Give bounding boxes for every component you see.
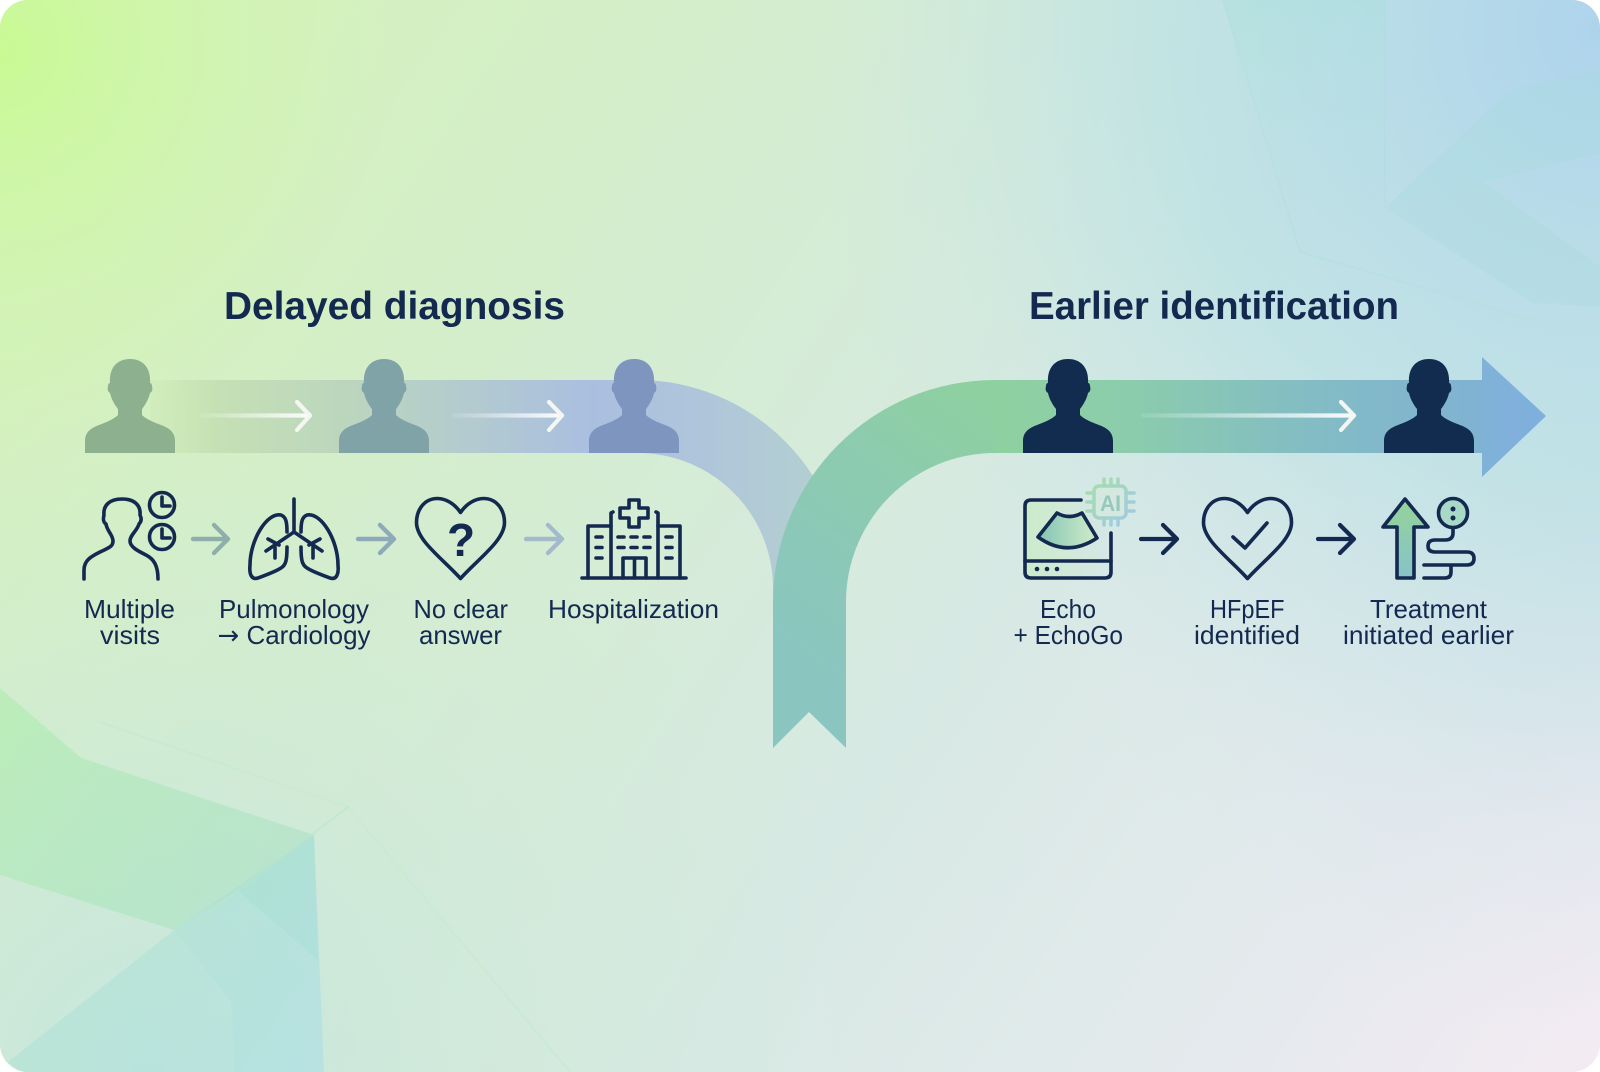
- label: No clear answer: answer: [419, 620, 502, 650]
- label: No clear answer: No clear: [414, 594, 508, 624]
- patient figure 1: [85, 359, 175, 453]
- white arrow between figures 2 and 3: [454, 402, 562, 430]
- icon: echo ultrasound device with AI chip: AI: [1100, 491, 1121, 516]
- title: Delayed diagnosis: Delayed diagnosis: [224, 285, 565, 328]
- arrow: echo to heart: [1141, 525, 1177, 553]
- label: Echo + EchoGo: Echo: [1040, 594, 1096, 624]
- title: Earlier identification: Earlier identification: [1029, 285, 1399, 328]
- label: HFpEF identified: [1194, 594, 1300, 650]
- label: Multiple visits: Multiple: [84, 594, 175, 624]
- label: Treatment initiated earlier: Treatment: [1370, 594, 1488, 624]
- icon: heart with question mark: [416, 498, 504, 578]
- icon: heart with check mark: [1204, 498, 1292, 578]
- icon: echo ultrasound device with AI chip: [1025, 479, 1134, 578]
- icon: up arrow with stethoscope: [1383, 498, 1474, 578]
- icon: lungs: [250, 499, 338, 578]
- arrow: lungs to heart: [358, 525, 394, 553]
- patient figure 4: [1023, 359, 1113, 453]
- icon: hospital: [582, 500, 686, 578]
- white arrow between figures 4 and 5: [1143, 402, 1354, 430]
- label: Multiple visits: [84, 594, 175, 650]
- label: Echo + EchoGo: [1014, 594, 1123, 650]
- arrow: heart to hospital: [526, 525, 562, 553]
- label: Multiple visits: visits: [100, 620, 160, 650]
- arrow: visits to lungs: [193, 525, 228, 553]
- label: HFpEF identified: HFpEF: [1210, 594, 1284, 624]
- patient figure 5: [1384, 359, 1474, 453]
- right ribbon: curved tail: [773, 380, 995, 748]
- label: Treatment initiated earlier: [1343, 594, 1514, 650]
- icon: person with two clocks: [84, 492, 174, 579]
- left ribbon: delayed diagnosis path: [150, 380, 846, 620]
- label: Hospitalization: Hospitalization: [548, 594, 719, 624]
- label: No clear answer: [414, 594, 508, 650]
- label: Pulmonology to Cardiology: [218, 594, 370, 651]
- icon: heart with question mark: ?: [447, 514, 475, 566]
- label: Treatment initiated earlier: initiated earlier: [1343, 620, 1514, 650]
- patient figure 3: [589, 359, 679, 453]
- label: HFpEF identified: identified: [1194, 620, 1300, 650]
- right ribbon: horizontal band and arrowhead: [995, 357, 1546, 477]
- label: Pulmonology to Cardiology: → Cardiology: [218, 620, 370, 651]
- label: Echo + EchoGo: + EchoGo: [1014, 620, 1123, 650]
- arrow: heart to treatment: [1318, 525, 1354, 553]
- white arrow between figures 1 and 2: [201, 402, 310, 430]
- label: Pulmonology to Cardiology: Pulmonology: [219, 594, 369, 624]
- patient figure 2: [339, 359, 429, 453]
